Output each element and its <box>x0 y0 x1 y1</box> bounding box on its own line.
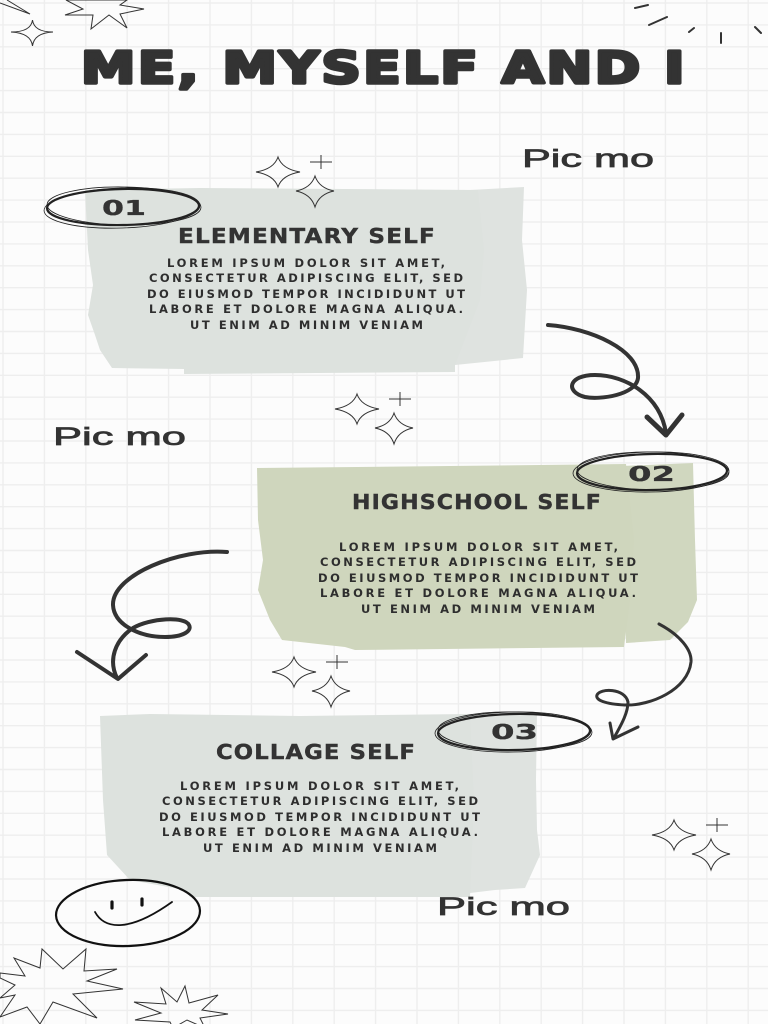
arrow: two to three left <box>77 552 227 679</box>
badge: 02: 02 <box>628 462 675 486</box>
text block: collage self <box>159 779 480 855</box>
text block: elementary self: UT ENIM AD MINIM VENIAM <box>190 318 423 332</box>
label: pic mo bottom: Pic mo <box>437 893 570 921</box>
sparkles: cluster four <box>652 818 730 870</box>
icon: top right sparkle dashes <box>635 5 761 43</box>
text block: highschool self <box>318 540 638 616</box>
arrow: one to two <box>548 325 682 435</box>
icon: bottom middle star <box>134 986 228 1024</box>
icon: top left star doodles <box>0 0 144 46</box>
text block: highschool self: LABORE ET DOLORE MAGNA ALIQUA. <box>320 586 636 600</box>
badge: 03 <box>435 711 592 753</box>
text block: collage self: CONSECTETUR ADIPISCING ELIT, SED <box>162 794 478 808</box>
badge: 01: 01 <box>102 196 146 220</box>
title: ME, MYSELF AND I <box>81 43 687 94</box>
text block: highschool self: DO EIUSMOD TEMPOR INCIDIDUNT UT <box>318 571 638 585</box>
label: pic mo top: Pic mo <box>522 145 654 173</box>
text block: elementary self: LOREM IPSUM DOLOR SIT AMET, <box>167 256 445 270</box>
sparkles: cluster one <box>256 155 334 207</box>
heading: elementary self: ELEMENTARY SELF <box>178 224 436 248</box>
text block: elementary self: LABORE ET DOLORE MAGNA ALIQUA. <box>149 302 463 316</box>
text block: highschool self: CONSECTETUR ADIPISCING ELIT, SED <box>320 555 636 569</box>
text block: elementary self <box>147 256 465 332</box>
sparkles: cluster three <box>272 655 350 707</box>
text block: highschool self: UT ENIM AD MINIM VENIAM <box>361 602 595 616</box>
text block: elementary self: DO EIUSMOD TEMPOR INCIDIDUNT UT <box>147 287 465 301</box>
panel: highschool self <box>257 451 729 650</box>
badge: 03: 03 <box>491 720 538 744</box>
text block: collage self: DO EIUSMOD TEMPOR INCIDIDUNT UT <box>159 810 480 824</box>
text block: collage self: UT ENIM AD MINIM VENIAM <box>203 841 437 855</box>
label: pic mo left: Pic mo <box>53 423 186 451</box>
sparkles: cluster two <box>335 392 413 444</box>
panel: collage self <box>100 711 592 897</box>
arrow: two to three right <box>597 624 691 739</box>
text block: collage self: LABORE ET DOLORE MAGNA ALIQUA. <box>162 825 478 839</box>
text block: highschool self: LOREM IPSUM DOLOR SIT AMET, <box>339 540 618 554</box>
heading: highschool self: HIGHSCHOOL SELF <box>352 490 602 514</box>
badge: 01 <box>43 185 201 231</box>
panel: elementary self <box>43 185 527 374</box>
text block: elementary self: CONSECTETUR ADIPISCING ELIT, SED <box>149 271 463 285</box>
badge: 02 <box>573 451 729 493</box>
heading: collage self: COLLAGE SELF <box>216 740 416 764</box>
icon: bottom left star <box>0 949 123 1024</box>
icon: smiley face <box>55 878 201 948</box>
text block: collage self: LOREM IPSUM DOLOR SIT AMET, <box>180 779 459 793</box>
